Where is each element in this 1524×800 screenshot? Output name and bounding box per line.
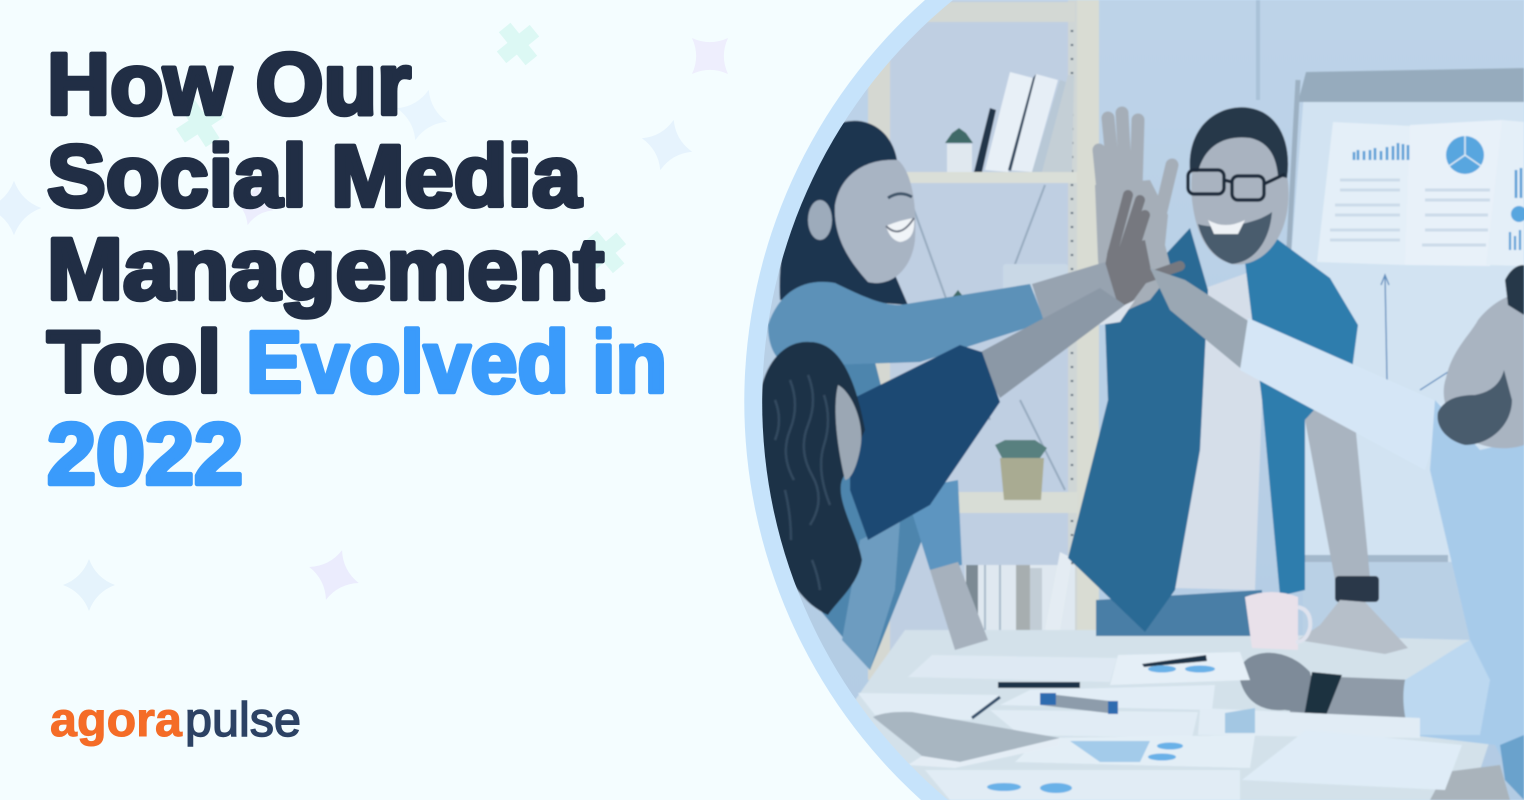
potted plants [945, 128, 1047, 500]
title [47, 36, 667, 503]
whiteboard [1256, 0, 1524, 562]
charts pinned to board [1317, 120, 1524, 266]
curved photo border [744, 0, 1524, 800]
shelving unit [868, 0, 1099, 680]
laptop [873, 712, 1060, 768]
title: Evolved in [246, 314, 667, 411]
logo: agorapulse: pulse [185, 694, 301, 747]
books top shelf [974, 72, 1074, 172]
raised hands [1032, 113, 1270, 372]
logo: agorapulse: agora [50, 694, 182, 747]
papers and pens on table [858, 652, 1420, 800]
title: How Our [47, 36, 411, 133]
notebook [1244, 736, 1461, 791]
title: Tool [47, 314, 221, 411]
person: woman with curly hair [761, 288, 1125, 615]
title: Social Media [47, 128, 582, 225]
person: woman with dark hair [768, 121, 1045, 670]
person: man in teal shirt [1068, 107, 1408, 654]
coffee mug [1245, 592, 1310, 650]
wall [744, 0, 1524, 800]
decorative sparkles and crosses [0, 20, 746, 611]
photo: team high five [744, 0, 1524, 800]
logo: agorapulse [50, 694, 301, 747]
title: Management [47, 221, 604, 318]
title: 2022 [47, 406, 243, 503]
books lower shelf [965, 552, 1075, 630]
person: man in light shirt [1240, 265, 1524, 800]
table [855, 630, 1490, 800]
